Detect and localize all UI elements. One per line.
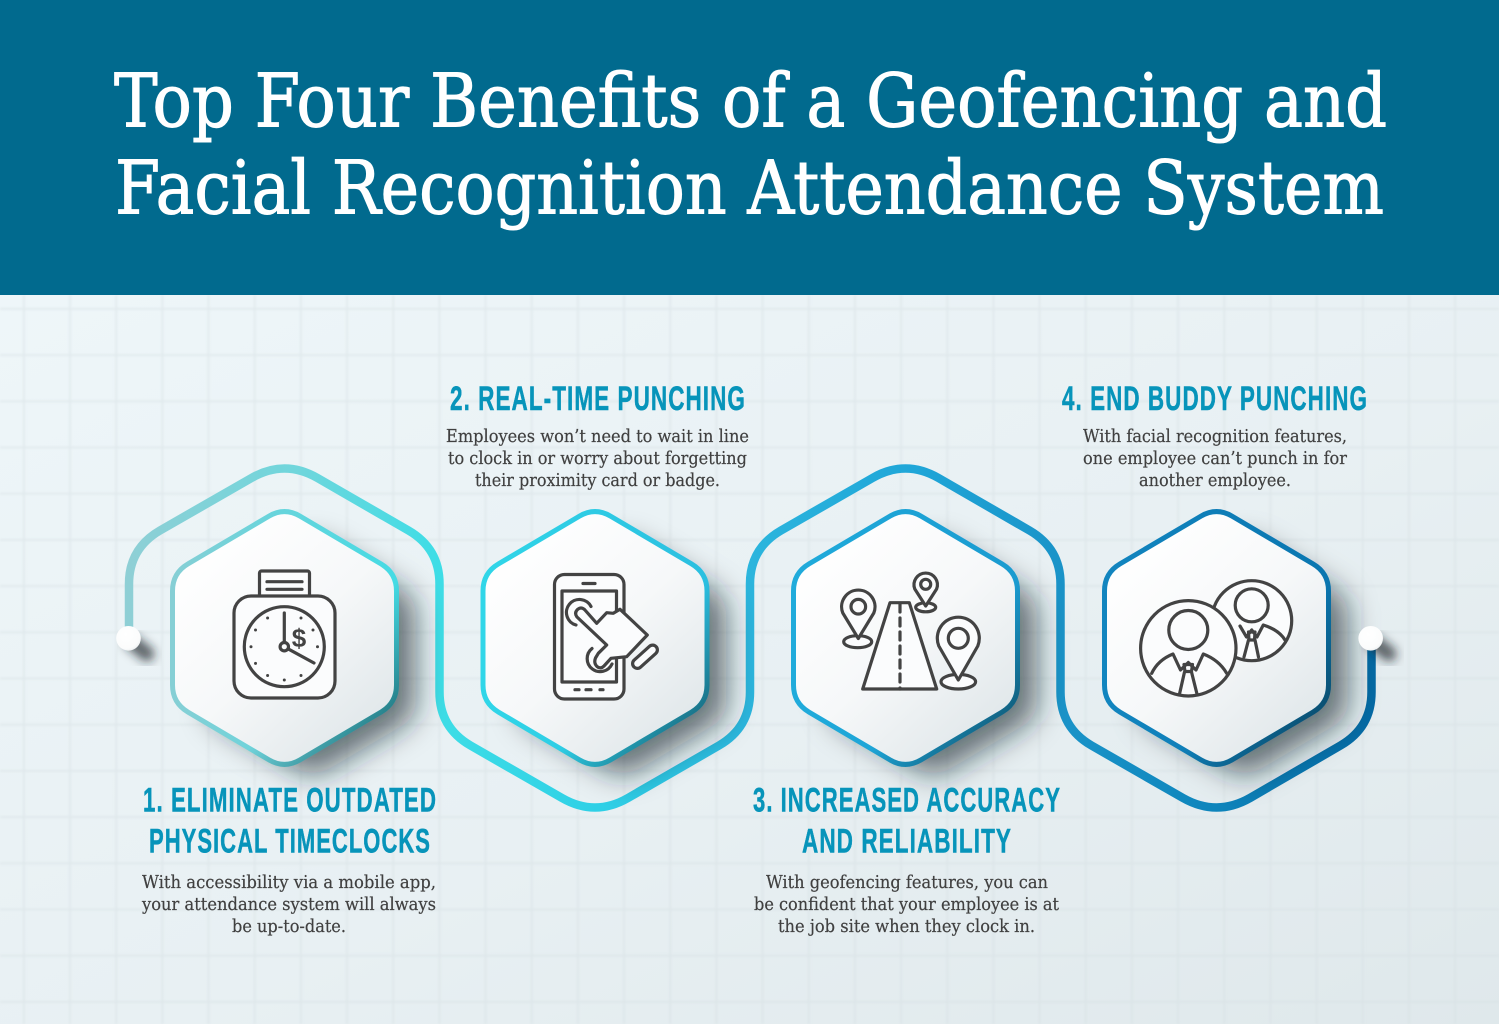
- text: step 4 description: another employee.: [1139, 471, 1291, 491]
- step 4 text: [1062, 380, 1368, 491]
- heading: step 3: [753, 782, 1061, 860]
- text: step 3 description: With geofencing features, you can: [766, 873, 1048, 893]
- icon: road with location pins: [842, 573, 979, 689]
- icon: two employees: [1141, 581, 1292, 696]
- text: step 2 description: to clock in or worry about forgetting: [448, 449, 747, 469]
- icon: phone with touching hand: [554, 574, 659, 699]
- text: step 1 description: your attendance system will always: [141, 895, 436, 915]
- connecting hexagonal line: [129, 468, 1372, 808]
- step 1 text: [141, 782, 437, 937]
- text: step 4 description: [1083, 427, 1348, 491]
- end dot: [1358, 626, 1389, 654]
- start dot: [116, 626, 147, 654]
- text: step 2 description: their proximity card or badge.: [475, 471, 720, 491]
- panel: hexagon 4 people: [1104, 512, 1348, 774]
- step 2 text: [446, 380, 749, 491]
- text: step 1 description: be up-to-date.: [232, 917, 346, 937]
- icon: timeclock: $: [292, 623, 307, 653]
- icon: timeclock: [234, 571, 335, 698]
- header banner: [0, 0, 1499, 295]
- text: step 3 description: be confident that your employee is at: [754, 895, 1059, 915]
- panel: hexagon 3 road: [794, 512, 1037, 774]
- text: step 4 description: With facial recognition features,: [1083, 427, 1347, 447]
- heading: step 2: 2. REAL-TIME PUNCHING: [450, 380, 746, 418]
- text: step 1 description: [141, 873, 436, 937]
- heading: step 1: [143, 782, 437, 860]
- heading: step 3: AND RELIABILITY: [802, 822, 1012, 860]
- text: step 2 description: Employees won’t need to wait in line: [446, 427, 749, 447]
- text: step 3 description: [754, 873, 1059, 937]
- page background with grid: [0, 295, 1499, 1024]
- panel: hexagon 1 timeclock: [172, 512, 416, 774]
- heading: step 3: 3. INCREASED ACCURACY: [753, 782, 1061, 820]
- heading: step 1: 1. ELIMINATE OUTDATED: [143, 782, 437, 820]
- heading: step 1: PHYSICAL TIMECLOCKS: [149, 822, 431, 860]
- text: step 3 description: the job site when they clock in.: [778, 917, 1035, 937]
- title: [114, 59, 1387, 231]
- text: step 2 description: [446, 427, 749, 491]
- text: step 4 description: one employee can’t punch in for: [1083, 449, 1348, 469]
- panel: hexagon 2 phone: [483, 512, 726, 774]
- step 3 text: [753, 782, 1061, 937]
- text: step 1 description: With accessibility via a mobile app,: [142, 873, 436, 893]
